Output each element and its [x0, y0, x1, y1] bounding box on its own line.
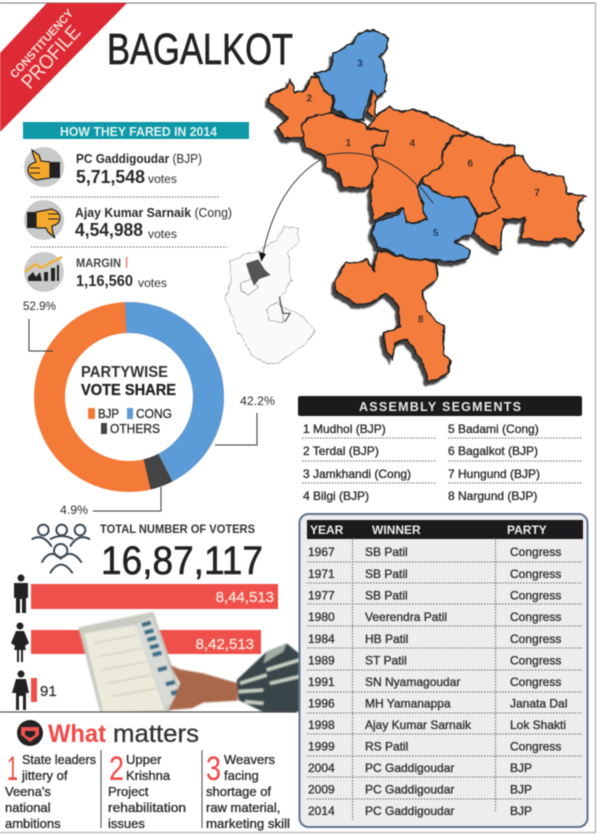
donut legend: OTHERS [110, 421, 160, 436]
map numbers: 7 [534, 188, 540, 199]
table rows: BJP [510, 804, 532, 818]
table rows: PC Gaddigoudar [365, 761, 454, 775]
panel: assembly segments [298, 396, 582, 503]
donut centre title [81, 364, 176, 399]
table rows [308, 545, 567, 818]
donut chart: partywise vote share [47, 315, 211, 479]
icon: female figure [11, 622, 29, 662]
segment list: 5 Badami (Cong) [448, 422, 539, 436]
callout: 42.2% [215, 394, 275, 445]
table rows: 1989 [308, 654, 335, 668]
runner-up block [24, 200, 232, 241]
table header: WINNER [372, 523, 421, 537]
callout: 4.9%: 4.9% [60, 503, 88, 517]
text: Ajay Kumar Sarnaik votes: Ajay Kumar Sarnaik (Cong) [75, 206, 232, 220]
donut legend: BJP [98, 406, 119, 421]
table rows: 2014 [308, 804, 335, 818]
table header: PARTY [507, 523, 547, 537]
text: PC Gaddigoudar votes: 5,71,548 [76, 167, 145, 187]
issue 2: Upper [126, 752, 162, 767]
text: Ajay Kumar Sarnaik votes: 4,54,988 [75, 220, 143, 240]
map region 8 [335, 250, 450, 382]
table rows: 1971 [308, 567, 335, 581]
text: total number of voters: 16,87,117 [101, 539, 263, 583]
table rows: Congress [510, 610, 561, 624]
issue 2 [108, 750, 186, 831]
map numbers: 8 [418, 314, 424, 325]
table rows: Ajay Kumar Sarnaik [365, 718, 472, 732]
issue 1: State leaders [22, 752, 96, 767]
heading: assembly segments: ASSEMBLY SEGMENTS [359, 400, 521, 414]
callout: 52.9%: 52.9% [23, 299, 56, 313]
table header [307, 520, 583, 539]
table rows: Lok Shakti [510, 718, 566, 732]
issue 2: Krishna [126, 768, 171, 783]
map region 6 [423, 133, 515, 215]
issue 2: issues [108, 816, 145, 831]
map: Karnataka locator [225, 227, 315, 363]
table rows: 2009 [308, 782, 335, 796]
winner block [24, 147, 202, 187]
map region 2 [270, 77, 333, 138]
text: margin votes: votes [138, 276, 167, 290]
donut centre title: PARTYWISE [81, 364, 168, 381]
callout: 52.9% [23, 299, 56, 351]
map region 4 [367, 90, 468, 223]
icon: third gender figure [12, 670, 29, 710]
segment list [303, 422, 540, 503]
banner: constituency profile [0, 3, 127, 132]
text: Ajay Kumar Sarnaik votes [75, 206, 232, 241]
issue 3: raw material, [206, 800, 280, 815]
table rows: Veerendra Patil [365, 610, 447, 624]
segment list: 8 Nargund (BJP) [448, 489, 537, 503]
table rows: Congress [510, 675, 561, 689]
bar: other voters: 91 [40, 683, 57, 700]
table rows: 1996 [308, 696, 335, 710]
panel: election winners table [300, 514, 588, 827]
text: PC Gaddigoudar votes: votes [148, 172, 177, 186]
text: Ajay Kumar Sarnaik votes: votes [148, 227, 177, 241]
table rows: MH Yamanappa [365, 696, 451, 710]
heading: how they fared in 2014 [23, 122, 249, 139]
callout: 4.9% [60, 487, 161, 517]
text: total number of voters: TOTAL NUMBER OF VOTERS [100, 522, 255, 536]
table rows: SB Patil [365, 545, 408, 559]
map region 1 [302, 113, 387, 188]
issue 3: 3 [206, 750, 221, 788]
bar: female voters [31, 630, 261, 654]
issue 2: Project [108, 784, 149, 799]
table rows: 1998 [308, 718, 335, 732]
map numbers: 2 [307, 94, 313, 105]
table rows: BJP [510, 782, 532, 796]
issue 3: facing [224, 768, 259, 783]
text: margin votes [76, 256, 167, 290]
table rows: RS Patil [365, 740, 408, 754]
heading: assembly segments [298, 396, 582, 416]
heading: what matters: matters [113, 720, 199, 748]
segment list: 3 Jamkhandi (Cong) [303, 467, 411, 481]
banner: constituency profile: CONSTITUENCY [8, 7, 76, 81]
icon: group of voters [32, 525, 90, 573]
map region 5 [372, 183, 478, 262]
table rows: PC Gaddigoudar [365, 782, 454, 796]
table rows: 2004 [308, 761, 335, 775]
table rows: HB Patil [365, 632, 408, 646]
issue 1: national [5, 800, 51, 815]
issue 1: jittery of [21, 768, 68, 783]
donut legend: CONG [136, 406, 172, 421]
issue 3 [206, 750, 290, 831]
issue 1 [5, 750, 96, 831]
table rows: 1980 [308, 610, 335, 624]
segment list: 2 Terdal (BJP) [303, 444, 379, 458]
donut legend [88, 406, 172, 436]
table rows: PC Gaddigoudar [365, 804, 454, 818]
issue 1: 1 [7, 750, 18, 788]
heading: what matters: What [48, 720, 107, 748]
table rows: 1967 [308, 545, 335, 559]
margin block [24, 252, 167, 292]
map region 3 [313, 30, 388, 120]
table rows: 1999 [308, 740, 335, 754]
map numbers: 1 [346, 138, 352, 149]
bar: other voters [31, 678, 57, 702]
icon: shield badge [17, 720, 43, 746]
map numbers [307, 59, 540, 325]
issue 3: marketing skill [206, 816, 290, 831]
table header: YEAR [310, 523, 344, 537]
table rows: Janata Dal [510, 696, 567, 710]
icon: thumbs down [24, 200, 64, 240]
issue 2: 2 [109, 750, 124, 788]
table rows: 1991 [308, 675, 335, 689]
table rows: Congress [510, 588, 561, 602]
text: PC Gaddigoudar votes [76, 152, 202, 187]
callout: 42.2%: 42.2% [240, 394, 275, 408]
table rows: Congress [510, 632, 561, 646]
table rows: BJP [510, 761, 532, 775]
text: margin votes: 1,16,560 [76, 273, 133, 290]
map region 7 [473, 155, 587, 250]
map numbers: 3 [357, 59, 363, 70]
issue 3: shortage of [206, 784, 271, 799]
arrow: map to locator [259, 160, 320, 262]
text: PC Gaddigoudar votes: PC Gaddigoudar (BJP) [76, 152, 202, 166]
bar: female voters: 8,42,513 [196, 636, 254, 653]
icon: margin chart [24, 252, 64, 292]
bar: male voters [31, 584, 278, 609]
heading: what matters [17, 720, 199, 748]
title: BAGALKOT [107, 25, 293, 74]
photo: electronic voting machine and hand [78, 612, 299, 712]
table rows: ST Patil [365, 654, 407, 668]
bar: male voters: 8,44,513 [216, 589, 274, 606]
issue 2: rehabilitation [108, 800, 186, 815]
map numbers: 4 [410, 139, 416, 150]
map numbers: 5 [433, 228, 439, 239]
table rows: Congress [510, 654, 561, 668]
text: margin votes: MARGIN [76, 256, 121, 270]
donut centre title: VOTE SHARE [81, 382, 176, 399]
issue 1: ambitions [5, 816, 61, 831]
table rows: SB Patil [365, 567, 408, 581]
issue 3: Weavers [224, 752, 276, 767]
segment list: 7 Hungund (BJP) [448, 467, 540, 481]
map numbers: 6 [468, 159, 474, 170]
heading: how they fared in 2014: HOW THEY FARED IN 2014 [60, 125, 217, 139]
segment list: 4 Bilgi (BJP) [303, 489, 369, 503]
table rows: SN Nyamagoudar [365, 675, 460, 689]
issue 1: Veena's [5, 784, 51, 799]
hand [168, 665, 238, 710]
segment list: 6 Bagalkot (BJP) [448, 444, 538, 458]
text: total number of voters [100, 522, 263, 583]
sleeve [237, 643, 299, 712]
table rows: Congress [510, 545, 561, 559]
voting machine [78, 612, 183, 712]
table rows: SB Patil [365, 588, 408, 602]
segment list: 1 Mudhol (BJP) [303, 422, 386, 436]
table rows: Congress [510, 567, 561, 581]
map: assembly segments of Bagalkot [270, 30, 587, 382]
table rows: 1984 [308, 632, 335, 646]
icon: male figure [14, 574, 28, 613]
banner: constituency profile: PROFILE [17, 21, 85, 93]
table rows: 1977 [308, 588, 335, 602]
table rows: Congress [510, 740, 561, 754]
icon: thumbs up [24, 147, 64, 187]
